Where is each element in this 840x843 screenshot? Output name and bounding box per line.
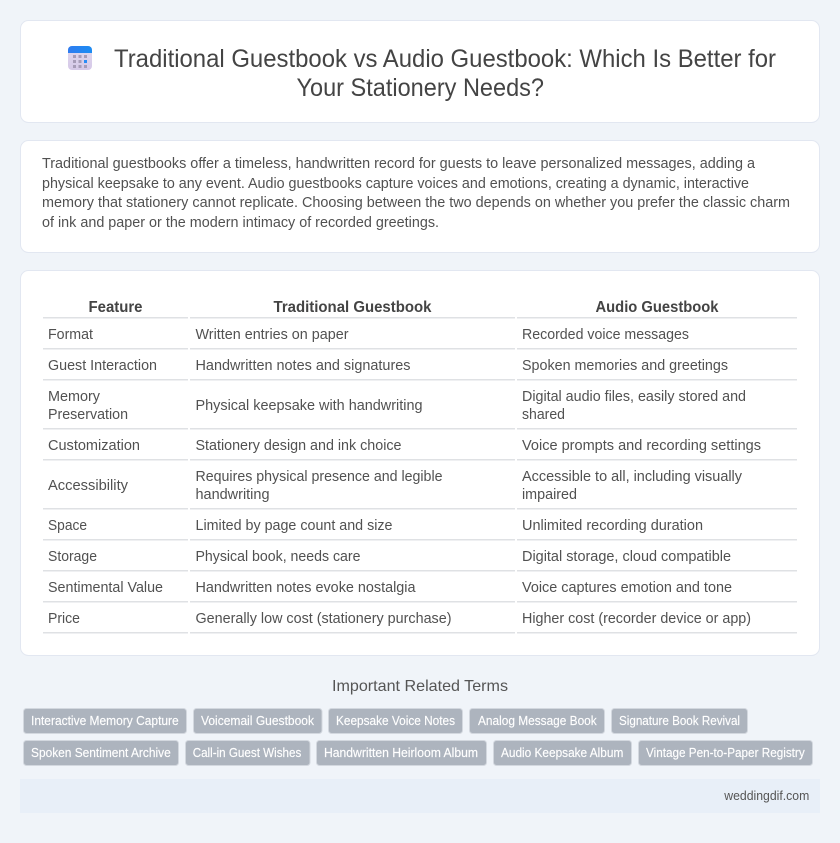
row: space [48, 518, 703, 534]
intro text block: Traditional guestbooks offer a timeless, handwritten record for guests to leave personalized messages, adding a [42, 156, 755, 172]
panel: related term tags [24, 708, 812, 766]
row: memory preservation: Physical keepsake with handwriting [196, 398, 422, 414]
row: accessibility: Accessibility [48, 478, 129, 494]
tag: vintage pen-to-paper registry [638, 740, 812, 766]
tag: interactive memory capture: Interactive Memory Capture [31, 714, 179, 728]
tag: call-in guest wishes [186, 740, 310, 766]
row: customization: Stationery design and ink choice [196, 438, 402, 454]
tag: vintage pen-to-paper registry: Vintage Pen-to-Paper Registry [646, 746, 805, 760]
row: price: Higher cost (recorder device or app) [522, 611, 751, 627]
row: storage: Physical book, needs care [196, 549, 360, 565]
row: guest interaction: Spoken memories and greetings [522, 358, 728, 374]
tag: signature book revival [612, 708, 748, 734]
row: space: Unlimited recording duration [522, 518, 703, 534]
row: sentimental value: Handwritten notes evoke nostalgia [196, 580, 416, 596]
row: storage: Storage [48, 549, 97, 565]
tag: voicemail guestbook: Voicemail Guestbook [201, 714, 315, 728]
row: accessibility: handwriting [196, 487, 270, 503]
row: storage: Digital storage, cloud compatible [522, 549, 731, 565]
intro text block: of ink and paper or the modern intimacy of recorded greetings. [42, 215, 439, 231]
row: price: Price [48, 611, 80, 627]
footer: weddingdif.com [723, 788, 809, 803]
tag: analog message book [470, 708, 604, 734]
tag: handwritten heirloom album [316, 740, 486, 766]
row: space: Limited by page count and size [196, 518, 392, 534]
table header row: Traditional Guestbook [274, 299, 432, 316]
row: price: Generally low cost (stationery purchase) [196, 611, 452, 627]
row: format: Format [48, 327, 93, 343]
row: price [48, 611, 751, 627]
table header row [88, 299, 719, 316]
row: sentimental value: Voice captures emotion and tone [522, 580, 732, 596]
row: customization [48, 438, 761, 454]
row: sentimental value [48, 580, 732, 596]
row: accessibility: Requires physical presence and legible [196, 469, 442, 485]
intro text block: physical keepsake to any event. Audio guestbooks capture voices and emotions, creating a dynamic, interactive [42, 176, 749, 192]
table header row: Feature [88, 299, 143, 316]
tag: spoken sentiment archive: Spoken Sentiment Archive [31, 746, 171, 760]
tag: audio keepsake album: Audio Keepsake Album [501, 746, 623, 760]
panel: comparison table [20, 270, 820, 656]
tag: keepsake voice notes [328, 708, 462, 734]
tag: handwritten heirloom album: Handwritten Heirloom Album [324, 746, 478, 760]
tag: audio keepsake album [494, 740, 632, 766]
panel: introduction [20, 140, 820, 252]
tag: analog message book: Analog Message Book [478, 714, 597, 728]
panel: title header [20, 20, 820, 122]
intro text block [42, 156, 790, 231]
row: space: Space [48, 518, 87, 534]
tag: spoken sentiment archive [24, 740, 178, 766]
row: accessibility: impaired [522, 487, 577, 503]
row: format: Written entries on paper [196, 327, 349, 343]
title [114, 45, 776, 102]
icon: calendar [68, 46, 92, 70]
footer [20, 779, 820, 813]
row: format: Recorded voice messages [522, 327, 689, 343]
row: accessibility: Accessible to all, including visually [522, 469, 743, 485]
table header row: Audio Guestbook [596, 299, 719, 316]
row: customization: Voice prompts and recording settings [522, 438, 761, 454]
heading: important related terms: Important Related Terms [332, 678, 508, 695]
tag: keepsake voice notes: Keepsake Voice Notes [336, 714, 455, 728]
row: guest interaction: Guest Interaction [48, 358, 157, 374]
row: memory preservation: Preservation [48, 407, 128, 423]
row: memory preservation: shared [522, 407, 565, 423]
row: memory preservation: Digital audio files, easily stored and [522, 389, 746, 405]
title: Traditional Guestbook vs Audio Guestbook: Which Is Better for [114, 45, 776, 73]
row: storage [48, 549, 731, 565]
intro text block: memory that stationery cannot replicate. Choosing between the two depends on whether you prefer the classic charm [42, 195, 790, 211]
row: memory preservation [48, 389, 746, 423]
tag: call-in guest wishes: Call-in Guest Wishes [193, 746, 301, 760]
row: guest interaction [48, 358, 728, 374]
tag: voicemail guestbook [194, 708, 322, 734]
row: accessibility [48, 469, 743, 503]
row: guest interaction: Handwritten notes and signatures [196, 358, 410, 374]
tag: signature book revival: Signature Book Revival [619, 714, 740, 728]
row: format [48, 327, 689, 343]
title: Your Stationery Needs? [296, 74, 544, 102]
row: customization: Customization [48, 438, 140, 454]
row: sentimental value: Sentimental Value [48, 580, 163, 596]
row: memory preservation: Memory [48, 389, 101, 405]
tag: interactive memory capture [24, 708, 186, 734]
